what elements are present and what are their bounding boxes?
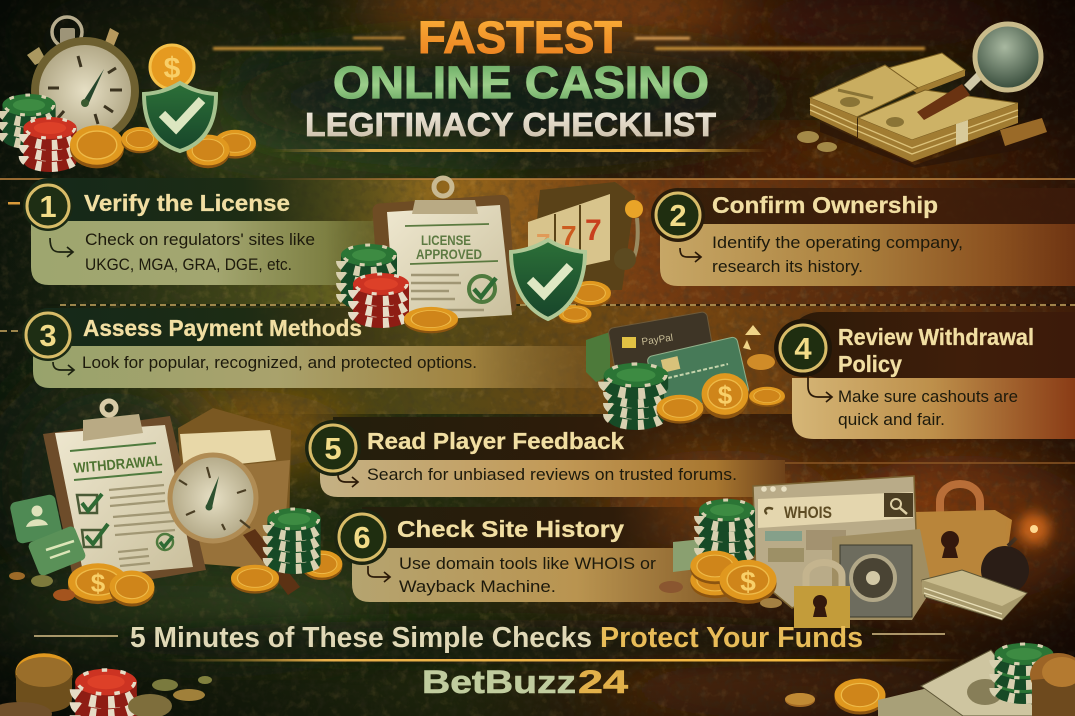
number badge 3: 3 [39,318,57,353]
title: LEGITIMACY CHECKLIST [305,106,716,143]
heading: Assess Payment Methods [83,315,362,341]
number badge 4 [774,319,832,377]
icon: stopwatch, chips, shield and coins: $ [164,52,181,85]
brand logo: BetBuzz [422,664,576,700]
body text [838,387,1018,429]
icon: withdrawal clipboard, folder and gauge magnifier: WITHDRAWAL [73,453,163,477]
brand logo: 24 [578,664,628,700]
body text: research its history. [712,257,863,276]
footer tagline [130,622,863,654]
panel: step 3 assess payment methods [22,308,640,388]
browser window [753,476,917,608]
body text: Look for popular, recognized, and protected options. [82,353,477,372]
icon: whois browser, safe, padlocks and cash: $ [740,566,756,597]
number badge 6 [334,509,390,565]
title: ONLINE CASINO [333,57,709,108]
panel: step 2 confirm ownership [651,188,1075,286]
heading: Verify the License [84,190,290,216]
safe [832,529,932,620]
padlock large [915,484,1012,594]
folder [178,408,291,550]
cash bundle [922,570,1027,620]
padlock small [794,562,850,628]
arrow [368,566,390,582]
icon: payment cards, chips and coins: $ [718,380,733,410]
slot machine: 7 [561,220,577,251]
icon: money stacks and magnifier [797,24,1047,168]
title: FASTEST [418,12,622,63]
icon: stopwatch, chips, shield and coins [2,17,256,172]
icon: whois browser, safe, padlocks and cash [659,476,1050,628]
body text: Identify the operating company, [712,233,963,252]
body text: quick and fair. [838,410,945,429]
body text [712,233,963,276]
coins and chips [68,563,128,604]
icon: bottom right cash and chips [785,643,1075,716]
number badge 2: 2 [669,198,687,233]
body text: Use domain tools like WHOIS or [399,554,656,573]
panel: step 6 check site history [334,507,760,602]
heading: Review Withdrawal [838,324,1034,350]
icon: payment cards, chips and coins [586,311,785,430]
slot machine: 7 [585,214,602,247]
number badge 1: 1 [39,189,57,224]
body text: Wayback Machine. [399,577,556,596]
body text: Check on regulators' sites like [85,230,315,249]
slot machine [528,182,643,290]
panel: step 5 read player feedback [305,417,785,497]
number badge 3 [22,309,74,361]
number badge 5 [305,420,361,476]
bomb [981,513,1050,594]
number badge 2 [651,188,705,242]
footer tagline: 5 Minutes of These Simple Checks [130,622,592,654]
icon: withdrawal clipboard, folder and gauge magnifier: $ [91,568,106,598]
icon: license approved clipboard with slot machine: LICENSE [421,233,471,248]
icon: bottom left chips and coins [0,653,212,716]
slot machine: 7 [536,228,550,258]
heading [838,324,1034,377]
heading: Check Site History [397,516,624,542]
panel: step 4 review withdrawal policy [774,312,1075,439]
arrow [680,248,701,262]
divider row lines [0,178,1075,662]
number badge 4: 4 [794,331,812,366]
arrow [53,362,74,375]
cash and chips [673,538,721,572]
number badge 1 [23,181,73,231]
icon: license approved clipboard with slot machine [341,178,643,333]
brand logo [422,664,628,700]
browser window: WHOIS [784,503,832,522]
body text: Make sure cashouts are [838,387,1018,406]
body text [399,554,656,596]
gauge magnifier [243,529,300,595]
icon: license approved clipboard with slot machine: APPROVED [416,247,482,262]
body text: UKGC, MGA, GRA, DGE, etc. [85,255,292,274]
arrow [338,475,358,487]
footer tagline: Protect Your Funds [600,622,863,654]
icon: payment cards, chips and coins: PayPal [641,333,674,348]
icon: withdrawal clipboard, folder and gauge magnifier [9,401,342,606]
arrow [50,238,73,257]
clipboard [43,416,206,592]
number badge 5: 5 [324,431,342,466]
title [213,12,925,152]
body text [85,230,315,274]
panel: step 1 verify the license [23,178,420,285]
number badge 6: 6 [353,520,371,555]
body text: Search for unbiased reviews on trusted forums. [367,465,737,484]
green cards [9,494,63,544]
arrow [808,376,832,402]
heading: Read Player Feedback [367,428,624,454]
heading: Policy [838,351,902,377]
heading: Confirm Ownership [712,192,938,218]
